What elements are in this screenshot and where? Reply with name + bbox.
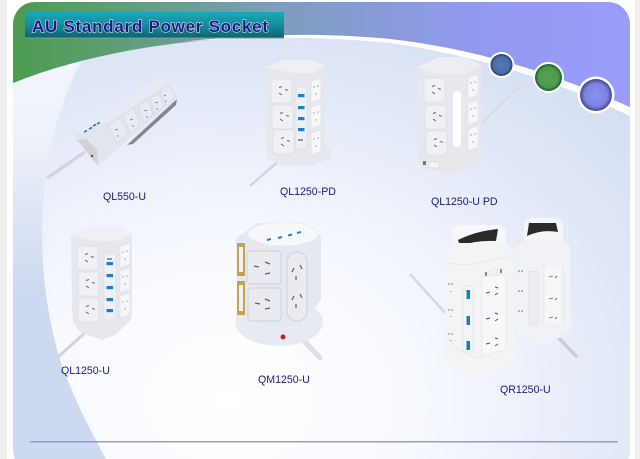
product: QL1250-U xyxy=(57,227,132,358)
header swoosh xyxy=(13,2,630,108)
product: QR1250-U xyxy=(410,218,577,377)
label: QR1250-U: QR1250-U xyxy=(500,384,551,396)
product: QL1250-PD xyxy=(250,60,331,186)
label: QL1250-U PD: QL1250-U PD xyxy=(431,196,498,208)
decorative circles xyxy=(488,52,614,114)
front tower xyxy=(443,225,516,377)
product: QL1250-U PD xyxy=(417,57,520,175)
footer rule xyxy=(30,441,618,442)
product: QM1250-U xyxy=(235,222,323,358)
back tower xyxy=(515,218,572,344)
product: QL550-U xyxy=(47,78,177,178)
label: QL550-U: QL550-U xyxy=(103,191,146,203)
label: QL1250-U: QL1250-U xyxy=(61,365,110,377)
label: QL1250-PD: QL1250-PD xyxy=(280,186,336,198)
title banner: AU Standard Power Socket xyxy=(32,17,268,36)
label: QM1250-U: QM1250-U xyxy=(258,374,310,386)
title banner xyxy=(25,12,284,38)
